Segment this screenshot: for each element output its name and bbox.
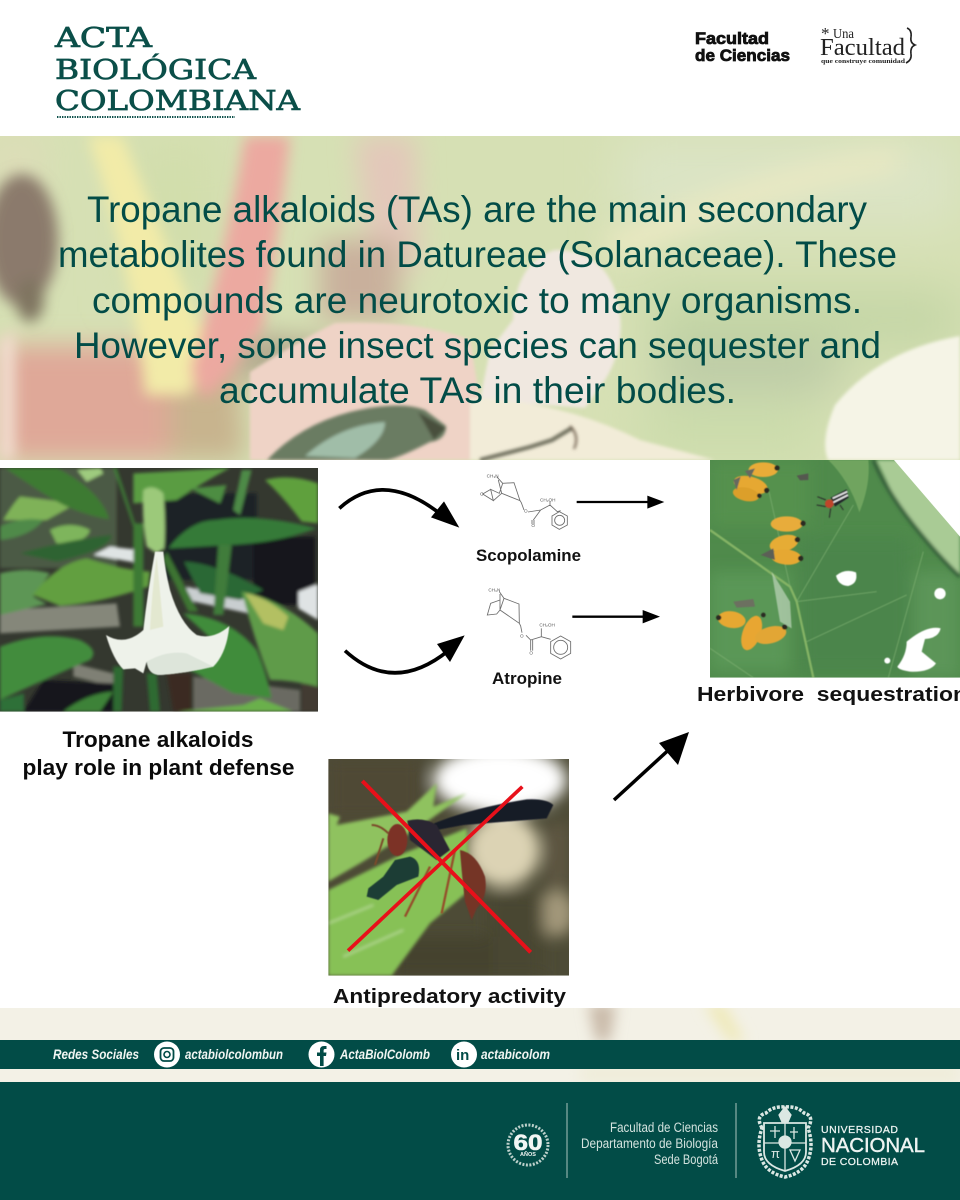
antipredatory activity label: Antipredatory activity [333, 985, 567, 1008]
background strip behind social band [0, 1004, 960, 1082]
chemical structure: scopolamine: O [480, 492, 484, 497]
diagonal arrow to herbivore sequestration [614, 732, 689, 800]
60 years emblem: AÑOS [520, 1151, 536, 1158]
university crest [759, 1107, 811, 1177]
logo: Facultad de Ciencias [695, 29, 790, 65]
white diagram panel [0, 460, 960, 1008]
chemical structure: atropine [487, 587, 571, 659]
intro paragraph: Tropane alkaloids (TAs) are the main secondary [87, 188, 867, 230]
chemical structure: scopolamine: O [524, 509, 528, 514]
journal logo: Acta Biológica Colombiana: ACTA [54, 23, 153, 54]
logo: Una Facultad que construye comunidad: * [821, 24, 830, 43]
faculty text: Sede Bogotá [654, 1152, 718, 1167]
caption: tropane alkaloids in plant defense: Tropane alkaloids [62, 727, 254, 752]
photo: larvae and beetle on leaf [710, 460, 960, 678]
curved arrow to atropine [345, 635, 465, 673]
journal logo: Acta Biológica Colombiana [54, 23, 301, 117]
journal logo: Acta Biológica Colombiana: BIOLÓGICA [55, 52, 257, 86]
icon: linkedin: in [456, 1047, 469, 1064]
icon: facebook [308, 1042, 334, 1068]
faculty text: Departamento de Biología [581, 1136, 718, 1151]
photo: wasp on leaf crossed out [328, 747, 575, 976]
intro paragraph: accumulate TAs in their bodies. [219, 369, 736, 411]
chemical structure: scopolamine: O [531, 523, 535, 528]
faculty text [567, 1103, 736, 1178]
logo: Facultad de Ciencias: Facultad [695, 29, 769, 48]
intro paragraph [58, 188, 897, 411]
university name [821, 1124, 925, 1168]
linkedin handle: actabicolom [481, 1046, 550, 1062]
60 years emblem [508, 1125, 548, 1165]
scopolamine label: Scopolamine [476, 546, 581, 565]
facebook handle: ActaBiolColomb [339, 1046, 430, 1062]
chemical structure: atropine: O [529, 651, 533, 656]
chemical structure: atropine: CH₃N [488, 587, 500, 592]
straight arrow from atropine [572, 610, 660, 623]
university name: DE COLOMBIA [821, 1156, 898, 1168]
journal logo: Acta Biológica Colombiana: COLOMBIANA [55, 86, 301, 117]
logo: Una Facultad que construye comunidad: que construye comunidad [821, 58, 905, 65]
chemical structure: scopolamine: CH₃N [487, 474, 499, 479]
chemical structure: atropine: O [520, 633, 524, 638]
logo: Una Facultad que construye comunidad: Una [833, 27, 855, 42]
background photo band, blurred flower and beetle [0, 136, 960, 460]
faculty text: Facultad de Ciencias [610, 1120, 718, 1135]
logo: Facultad de Ciencias: de Ciencias [695, 46, 790, 65]
adult flea beetle [831, 489, 849, 507]
photo: white angel's trumpet flower [0, 468, 318, 712]
social media band [0, 1040, 960, 1069]
intro paragraph: compounds are neurotoxic to many organisms. [92, 279, 862, 321]
beetle [267, 405, 576, 460]
chemical structure: atropine: CH₂OH [539, 622, 555, 627]
chemical structure: scopolamine: CH₂OH [540, 498, 556, 503]
university name: NACIONAL [821, 1134, 925, 1157]
atropine label: Atropine [492, 669, 562, 688]
intro paragraph: However, some insect species can sequester and [74, 324, 881, 366]
logo: Una Facultad que construye comunidad: Facultad [820, 35, 905, 61]
logo: Una Facultad que construye comunidad [820, 24, 915, 65]
footer bar [0, 1082, 960, 1200]
instagram handle: actabiolcolombun [185, 1046, 283, 1062]
caption: tropane alkaloids in plant defense [22, 727, 294, 780]
icon: instagram [154, 1042, 180, 1068]
caption: tropane alkaloids in plant defense: play role in plant defense [22, 755, 294, 780]
straight arrow from scopolamine [577, 496, 664, 509]
university name: UNIVERSIDAD [821, 1124, 898, 1136]
university crest: π [771, 1146, 780, 1161]
curved arrow to scopolamine [339, 490, 459, 528]
social heading: Redes Sociales [53, 1046, 139, 1062]
60 years emblem: 60 [514, 1130, 542, 1155]
herbivore sequestration label: Herbivore sequestration [697, 683, 960, 706]
larvae [716, 462, 808, 653]
icon: linkedin [451, 1042, 477, 1068]
chemical structure: scopolamine [480, 474, 567, 529]
intro paragraph: metabolites found in Datureae (Solanaceae). These [58, 233, 897, 275]
